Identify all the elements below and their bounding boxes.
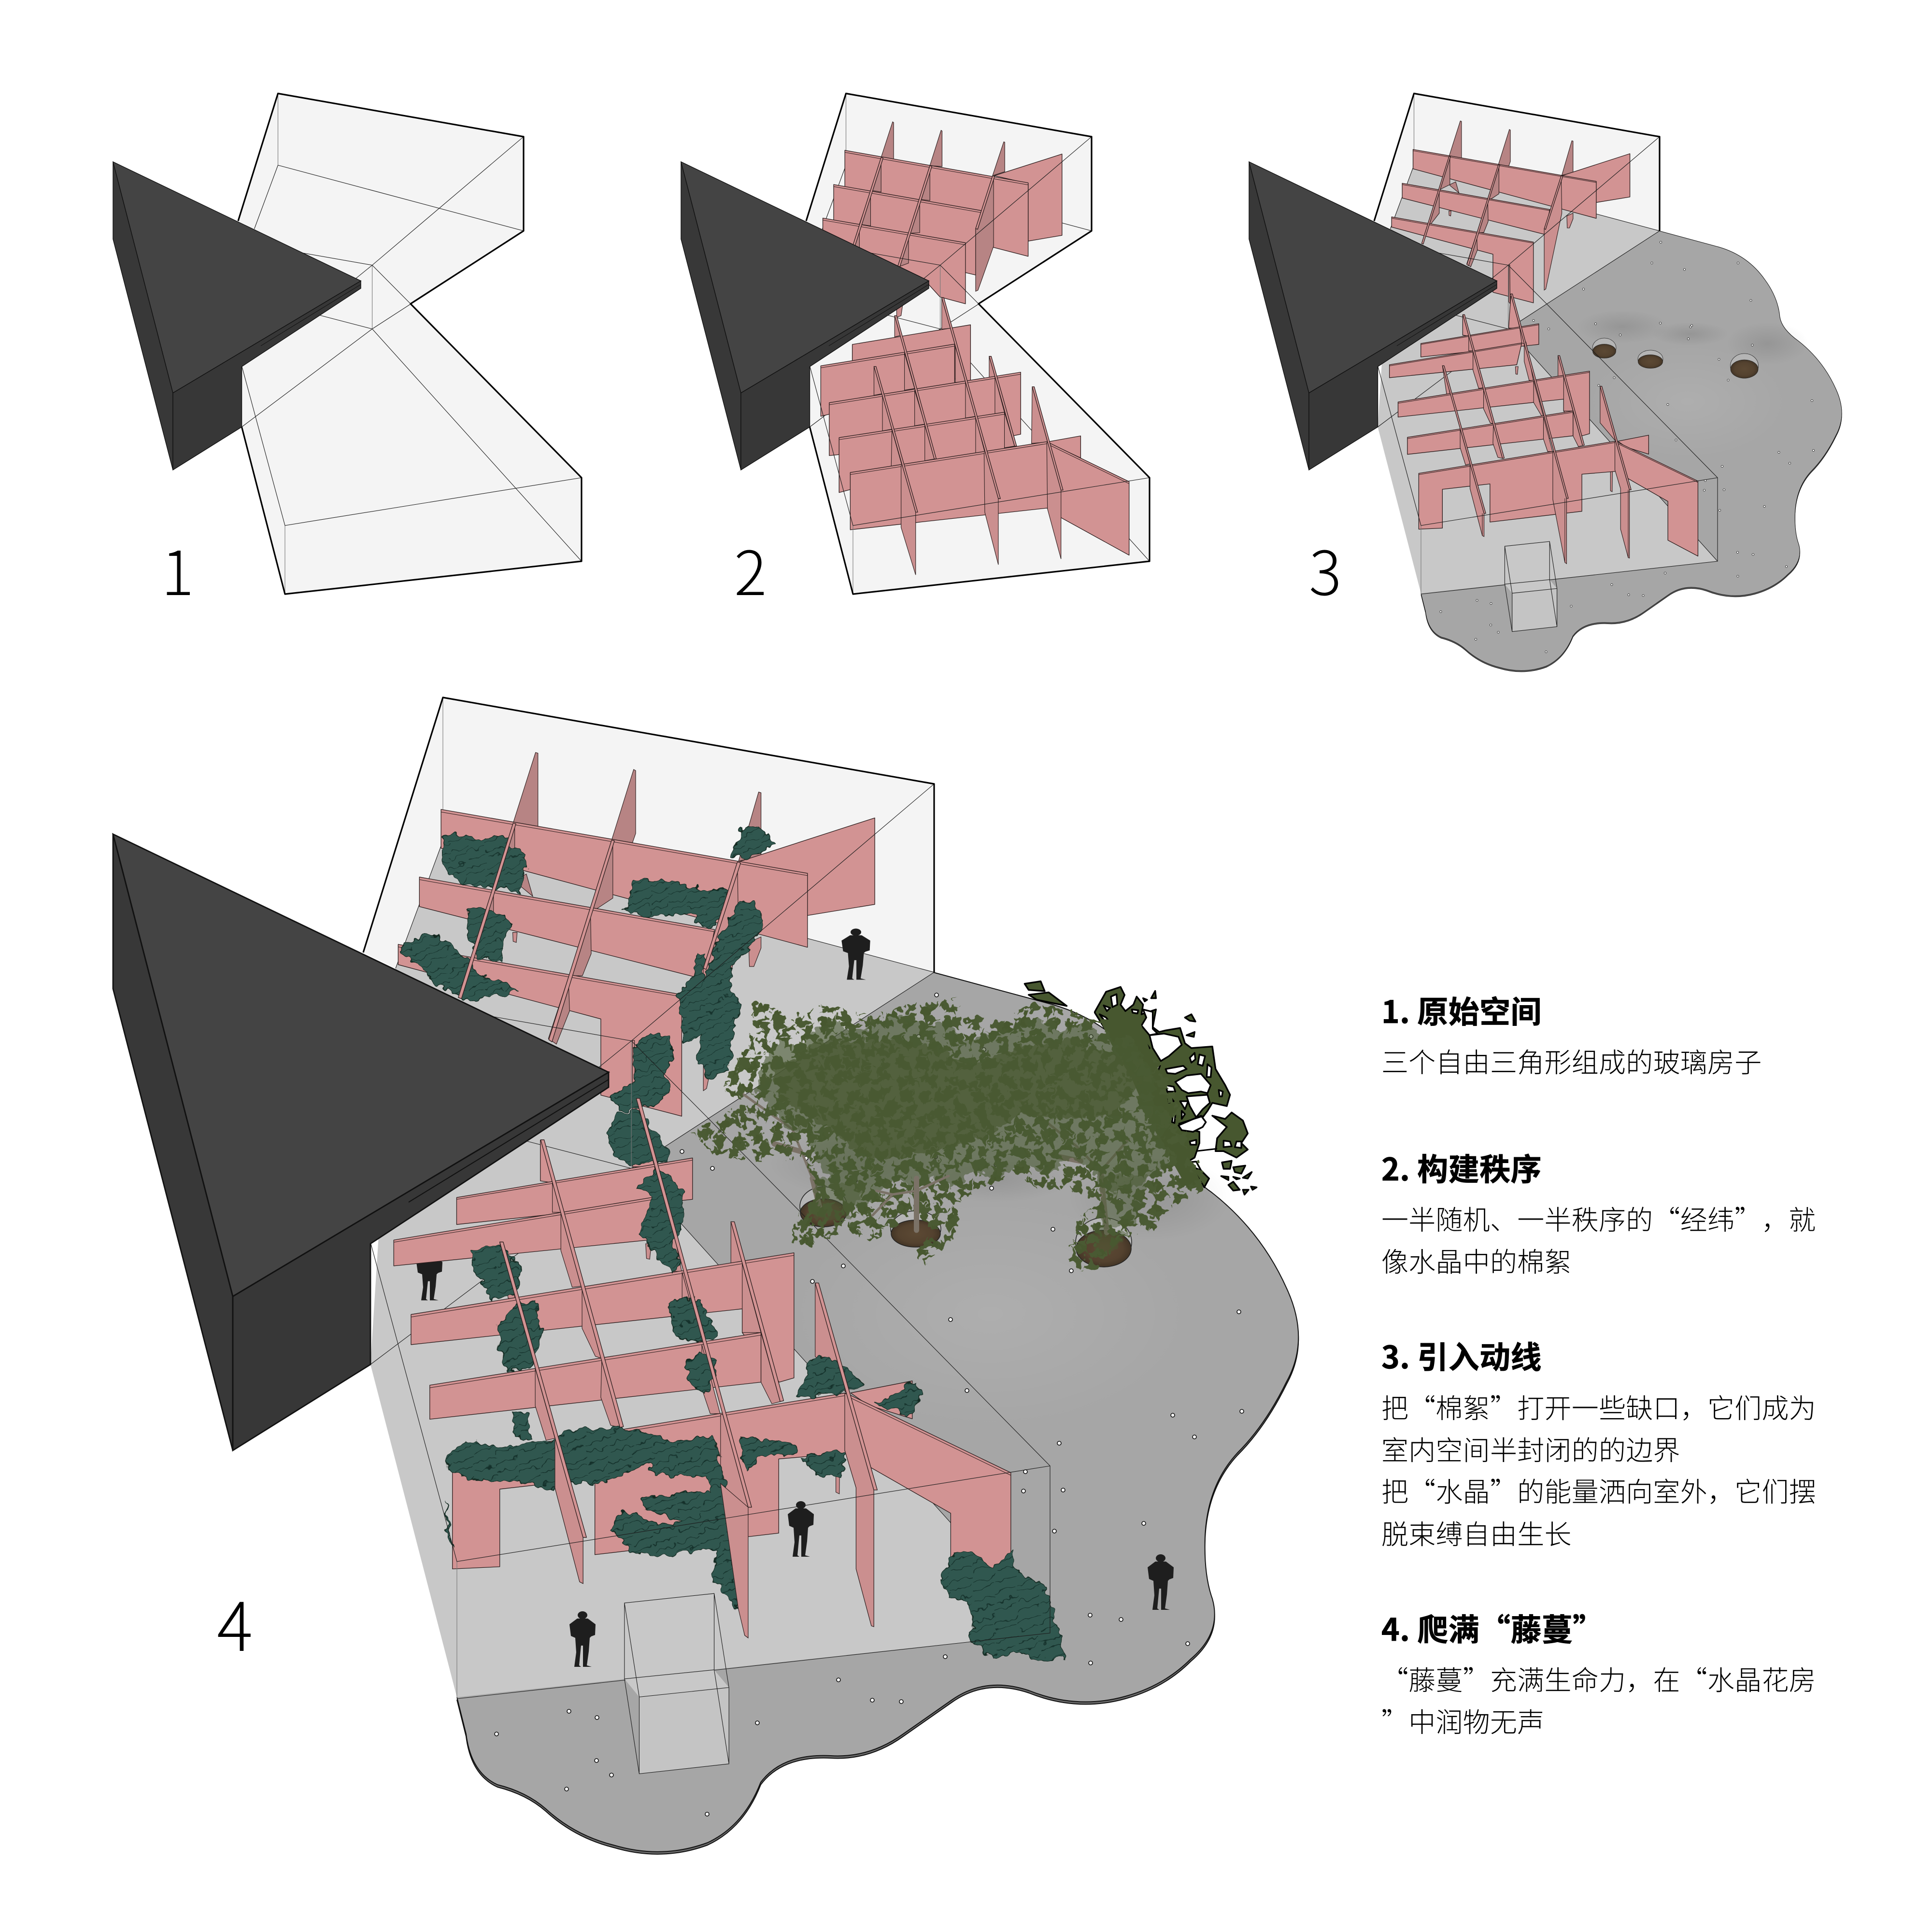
step 3 text: 把“棉絮”打开一些缺口，它们成为 bbox=[1381, 1387, 1816, 1426]
explanatory text column bbox=[1381, 988, 1816, 1740]
panel 2: ordering walls bbox=[681, 94, 1150, 613]
panel 3: circulation opened up bbox=[1249, 94, 1842, 672]
central tree trunk bbox=[872, 1176, 949, 1230]
panel 4: vines and trees bbox=[113, 697, 1298, 1854]
tree canopy leaves bbox=[692, 998, 1205, 1270]
person under walls bbox=[416, 1250, 442, 1300]
small leaves above blob edge bbox=[1024, 981, 1066, 1006]
site ground bbox=[370, 841, 1298, 1854]
step 3 text: 3. 引入动线 bbox=[1381, 1333, 1542, 1378]
outer leaves bbox=[692, 998, 1205, 1270]
glass edges bbox=[806, 94, 1150, 594]
entry box bbox=[1505, 541, 1557, 632]
step 4 text: 4. 爬满“藤蔓” bbox=[1381, 1605, 1604, 1650]
step 2 text: 2. 构建秩序 bbox=[1381, 1145, 1542, 1190]
dense canopy bbox=[756, 1016, 1173, 1252]
step 2 text: 像水晶中的棉絮 bbox=[1381, 1241, 1572, 1280]
step 2 text bbox=[1381, 1145, 1816, 1280]
step 3 text: 脱束缚自由生长 bbox=[1381, 1513, 1572, 1552]
back glass wall bbox=[363, 697, 934, 972]
site ground with soil holes bbox=[1378, 165, 1842, 672]
glass volume bbox=[238, 94, 582, 594]
vines: upper wing bbox=[400, 826, 777, 1273]
entry box bbox=[625, 1593, 729, 1774]
step 4 text: “藤蔓”充满生命力，在“水晶花房 bbox=[1381, 1659, 1816, 1698]
pink wall grid bbox=[394, 753, 1011, 1638]
back glass wall bbox=[1374, 94, 1660, 231]
dark triangular building bbox=[681, 162, 929, 470]
step 2 text: 一半随机、一半秩序的“经纬” bbox=[1381, 1199, 1762, 1238]
vines: lower wing bbox=[444, 1244, 1065, 1661]
pink wall grid bbox=[821, 122, 1129, 575]
step 1 text: 三个自由三角形组成的玻璃房子 bbox=[1381, 1041, 1762, 1080]
pink wall grid with openings bbox=[1390, 121, 1698, 564]
wall faces in front of vines bbox=[555, 1394, 874, 1638]
climbing vines bbox=[400, 826, 1065, 1661]
dark triangular building bbox=[113, 834, 609, 1450]
dark triangular building bbox=[1249, 162, 1497, 470]
tree trunks bbox=[740, 1092, 1129, 1233]
trees bbox=[692, 998, 1205, 1270]
wall top strips bbox=[458, 823, 877, 1537]
step 3 text bbox=[1381, 1333, 1816, 1552]
step 4 text bbox=[1381, 1605, 1816, 1740]
panel 1: original glass space bbox=[113, 94, 582, 613]
step 3 text: 把“水晶”的能量洒向室外，它们摆 bbox=[1381, 1471, 1816, 1510]
step 4 text: ”中润物无声 bbox=[1381, 1701, 1545, 1740]
foliage outlined against white bbox=[1095, 987, 1257, 1194]
step number 1: 1 bbox=[161, 525, 194, 613]
step 3 text: 室内空间半封闭的的边界 bbox=[1381, 1429, 1680, 1468]
step number 2: 2 bbox=[734, 525, 767, 613]
dark triangular building bbox=[113, 162, 361, 470]
glass volume bbox=[806, 94, 1150, 594]
step 1 text bbox=[1381, 988, 1762, 1080]
glass edges bbox=[363, 697, 1050, 1699]
back glass edges bbox=[370, 697, 1050, 1633]
people silhouettes bbox=[569, 929, 1174, 1667]
glass edges bbox=[1374, 94, 1718, 594]
step 1 text: 1. 原始空间 bbox=[1381, 988, 1542, 1032]
step 2 text: ，就 bbox=[1762, 1199, 1816, 1238]
step number 4: 4 bbox=[217, 1574, 253, 1671]
step number 3: 3 bbox=[1309, 525, 1341, 613]
back glass edges bbox=[1378, 94, 1718, 561]
